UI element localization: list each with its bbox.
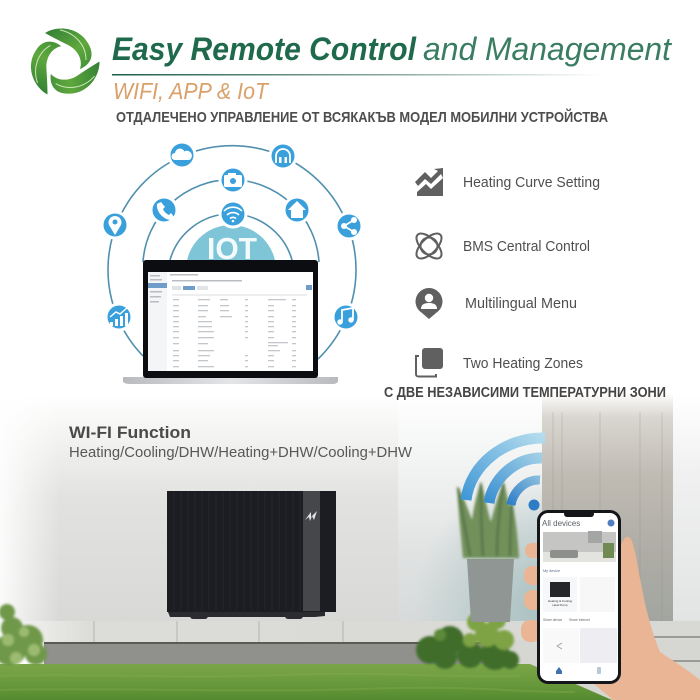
shrub: centre	[416, 611, 519, 670]
laptop screen frame	[143, 260, 318, 378]
IoT network diagram	[102, 142, 362, 359]
IOT badge: IOT	[207, 231, 257, 266]
icon: camera	[220, 167, 246, 193]
cabinet	[167, 491, 336, 612]
icon: overlapping squares	[416, 348, 443, 376]
title: Easy Remote Control	[112, 31, 417, 67]
feature: multilingual menu	[416, 288, 577, 319]
room photo banner	[543, 531, 616, 562]
smartphone app: Share Internet	[569, 618, 590, 622]
vertical grille	[174, 492, 300, 610]
heat pump unit	[167, 491, 336, 619]
palm and thumb	[593, 537, 700, 700]
icon: wifi	[220, 201, 246, 227]
bottom nav	[556, 667, 562, 674]
subtitle: WIFI, APP and IoT: WIFI, APP & IoT	[113, 78, 270, 104]
icon: rising curve	[415, 168, 443, 196]
device card: Heating & Cooling	[548, 599, 572, 603]
icon: music note	[333, 304, 359, 330]
smartphone app	[537, 510, 621, 684]
logo: three green leaves	[20, 29, 103, 104]
concrete ledge	[20, 621, 700, 700]
heading: wi-fi function: WI-FI Function	[69, 423, 191, 442]
feature: heating curve setting	[415, 168, 600, 196]
IOT badge	[186, 225, 276, 315]
potted plant	[457, 481, 519, 622]
side panel	[303, 491, 320, 611]
feature: multilingual menu: Multilingual Menu	[465, 295, 577, 312]
dashboard screen	[148, 272, 313, 371]
icon: telephone	[151, 197, 177, 223]
concentric arcs	[108, 146, 356, 359]
lawn	[0, 664, 612, 700]
icon: location pin	[102, 212, 128, 238]
heading: remote management in Bulgarian: ОТДАЛЕЧЕНО УПРАВЛЕНИЕ ОТ ВСЯКАКЪВ МОДЕЛ МОБИЛНИ УСТРОЙСТВА	[116, 108, 608, 126]
wifi signal symbol	[466, 438, 545, 510]
icon: headphones	[270, 143, 296, 169]
title	[112, 31, 672, 67]
table rows	[172, 294, 307, 367]
share section: Share device	[543, 618, 562, 622]
icon: home	[284, 197, 310, 223]
tabs	[172, 286, 181, 290]
feature: heating curve setting: Heating Curve Setting	[463, 174, 600, 191]
app header: All devices	[542, 519, 580, 528]
brand mark	[305, 511, 317, 521]
feature: BMS central control	[412, 229, 590, 263]
feature: two heating zones	[416, 348, 583, 376]
feature: BMS central control: BMS Central Control	[463, 238, 590, 255]
fingers	[521, 543, 543, 642]
icon: cloud	[169, 142, 195, 168]
icon: growth chart	[106, 304, 132, 330]
laptop base	[123, 377, 338, 384]
laptop with management dashboard	[123, 260, 338, 384]
icon: user pin	[416, 288, 442, 319]
feature: two heating zones: Two Heating Zones	[463, 355, 583, 372]
hand holding phone	[521, 537, 700, 700]
shrub: left	[0, 604, 47, 666]
device card	[543, 577, 577, 612]
heading: two independent temperature zones: С ДВЕ НЕЗАВИСИМИ ТЕМПЕРАТУРНИ ЗОНИ	[384, 385, 666, 401]
device section: My device	[543, 569, 560, 573]
feet	[168, 612, 325, 617]
icon: share	[336, 213, 362, 239]
selected menu item	[148, 283, 167, 288]
icon: atom	[412, 229, 446, 263]
text: operating modes: Heating/Cooling/DHW/Heating+DHW/Cooling+DHW	[69, 445, 412, 461]
device card: Heat Pump	[552, 603, 568, 607]
title: and Management	[423, 31, 672, 67]
